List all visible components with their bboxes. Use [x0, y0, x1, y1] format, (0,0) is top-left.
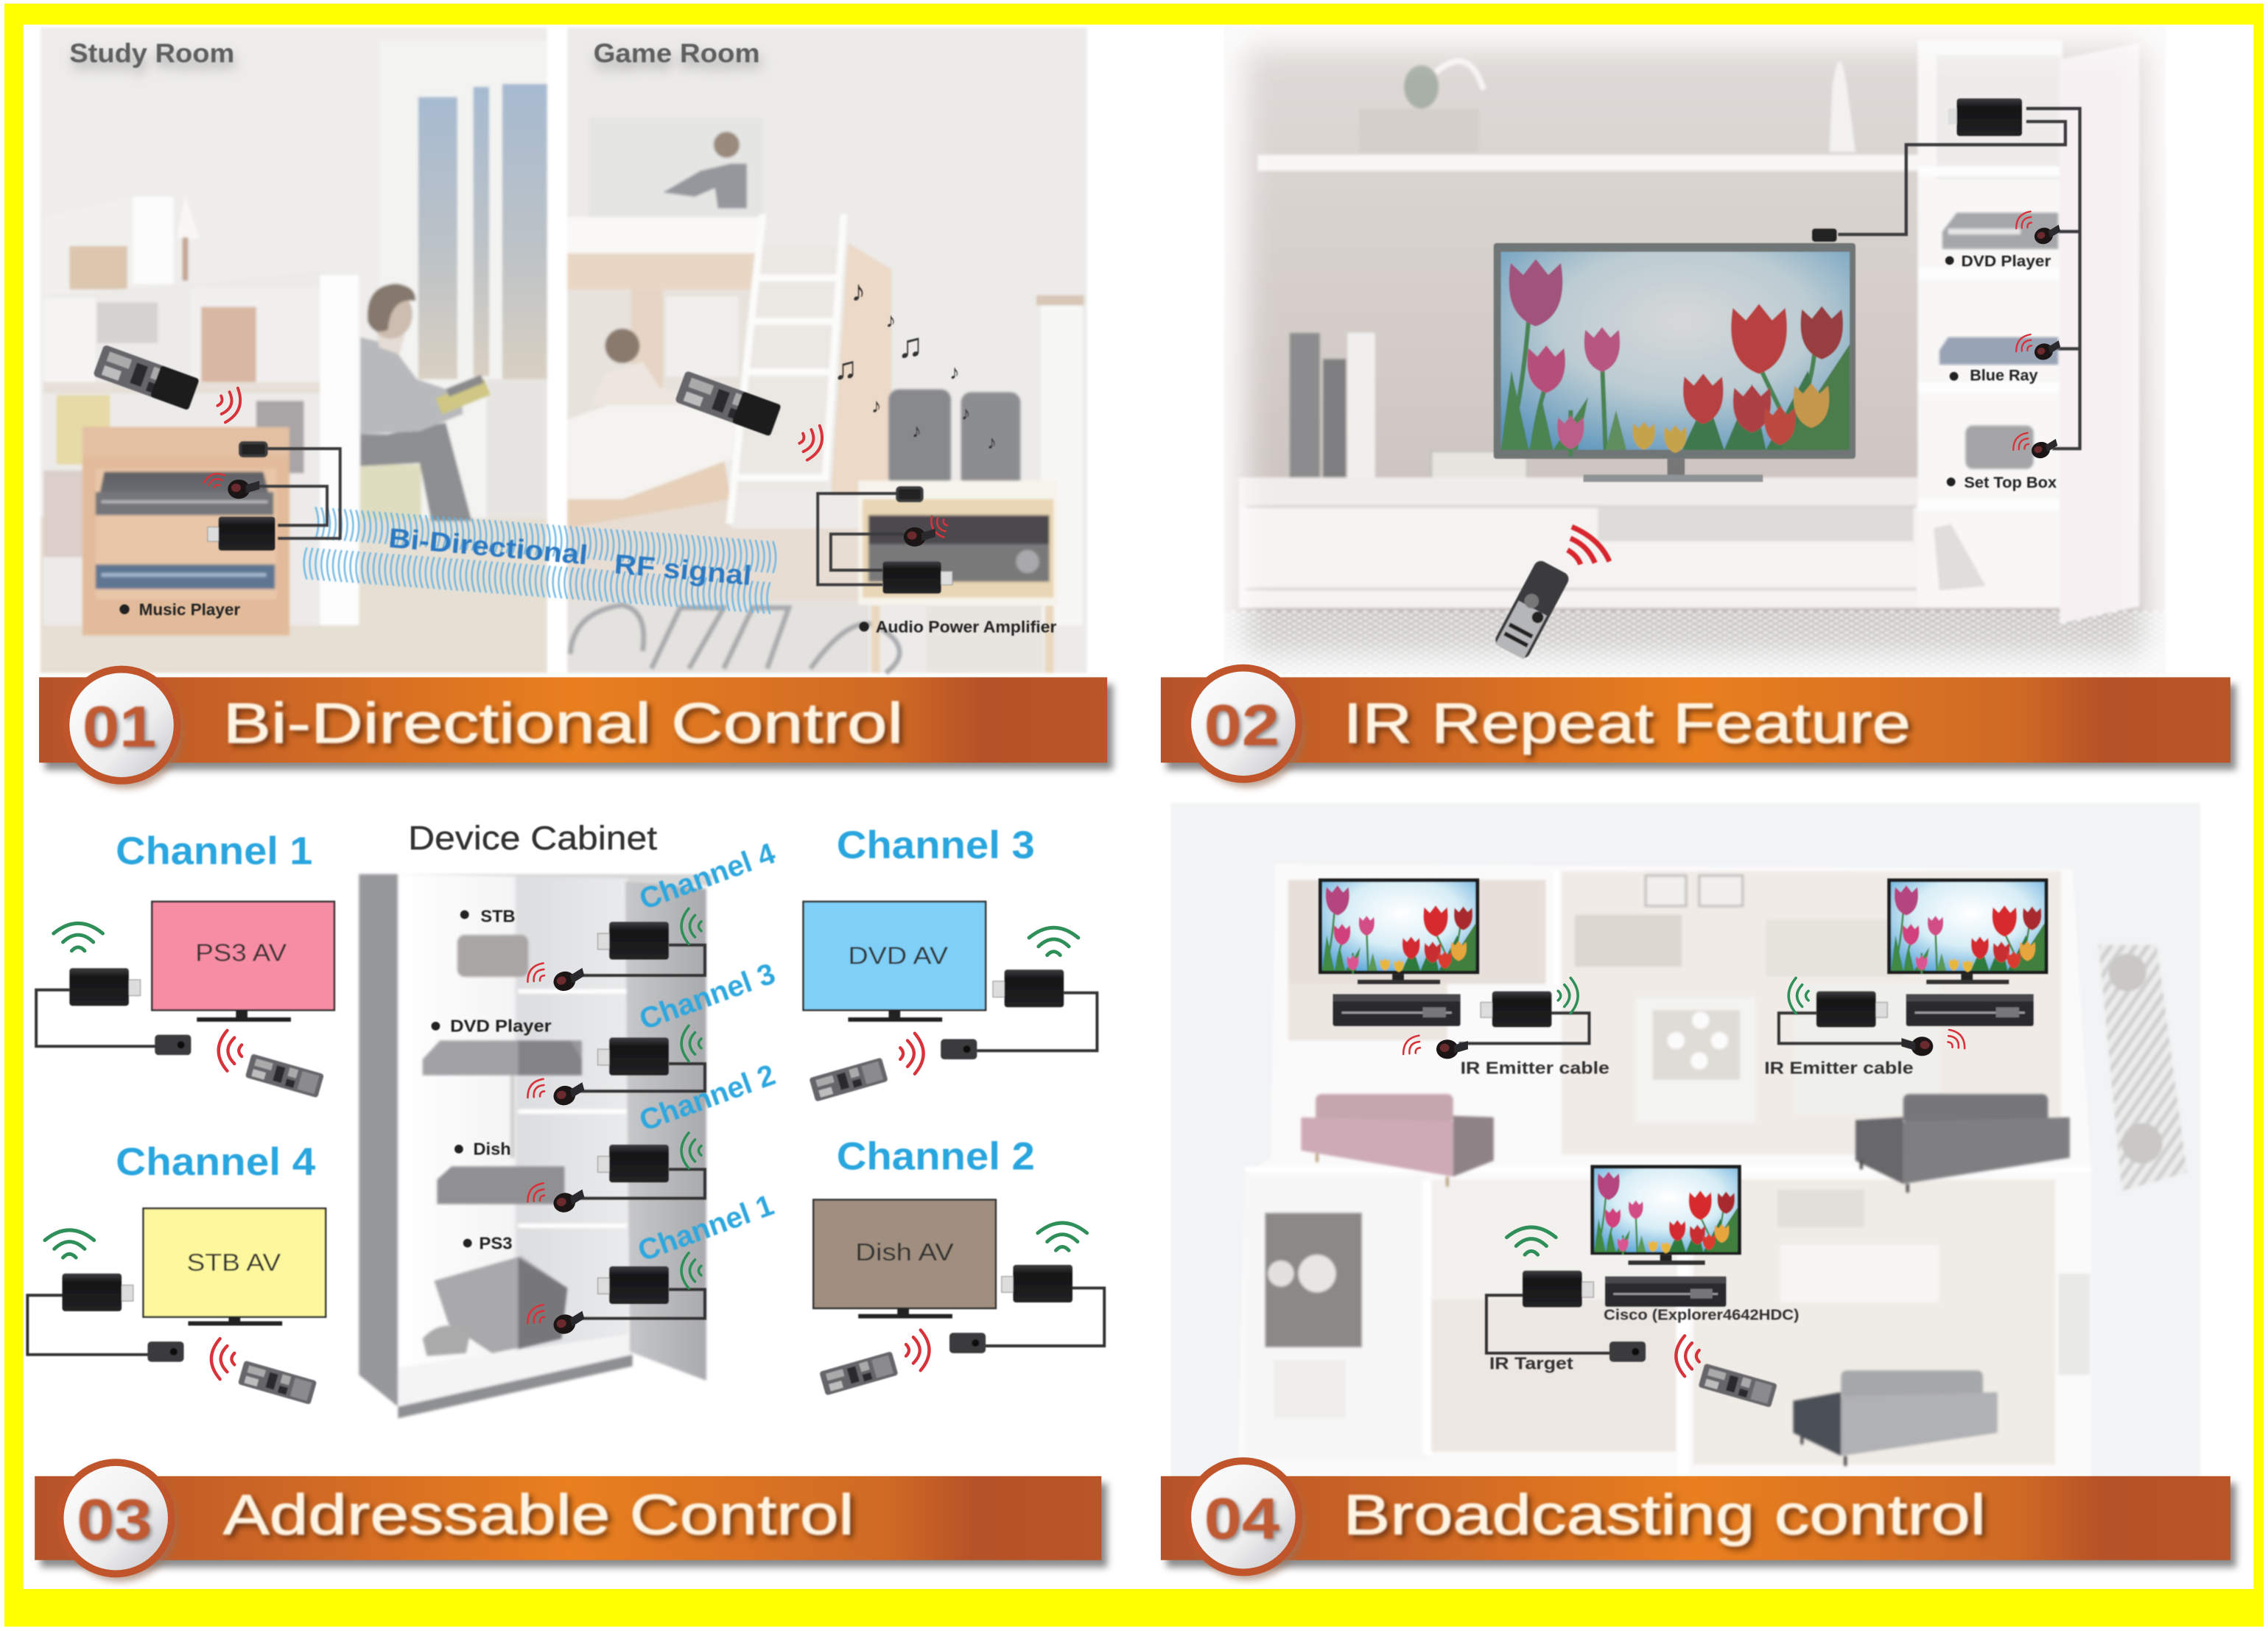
music notes — [834, 276, 997, 453]
banner 04 — [1161, 1461, 2236, 1580]
repeater: game room — [883, 561, 952, 594]
text: bi-directional RF signal: Bi-Directional — [387, 522, 589, 570]
repeater in cabinet — [1948, 99, 2022, 136]
labels: IR Emitter cable — [1461, 1059, 1609, 1078]
channel 1 group — [36, 829, 334, 1098]
music notes: ♪ — [886, 309, 896, 332]
IR signal — [900, 1034, 924, 1074]
DVD player — [1942, 213, 2058, 249]
banner 03: Addressable Control — [223, 1484, 854, 1546]
music notes: ♪ — [949, 361, 960, 384]
banner 02 — [1161, 668, 2236, 788]
labels: Cisco (Explorer4642HDC) — [1604, 1307, 1799, 1324]
label: set top box: Set Top Box — [1964, 473, 2057, 491]
banner 03 — [35, 1462, 1107, 1582]
banner 02: 02 — [1204, 693, 1279, 758]
banner 04: Broadcasting control — [1343, 1484, 1986, 1546]
green wireless arcs in cabinet — [681, 908, 701, 1288]
TV: DVD AV: DVD AV — [848, 942, 949, 969]
TV: STB AV: STB AV — [186, 1249, 281, 1277]
emitter at music player — [228, 480, 259, 499]
device: STB — [457, 935, 528, 977]
repeater and cable — [949, 1265, 1104, 1353]
music notes: ♪ — [912, 421, 921, 441]
TV: PS3 AV — [152, 902, 334, 1022]
channel 3 group — [804, 824, 1097, 1102]
cables study room — [240, 443, 340, 539]
heading: room labels: Game Room — [594, 38, 760, 68]
sofa: grey — [1856, 1094, 2070, 1193]
rotated channel labels: Channel 3 — [635, 957, 779, 1037]
photo: living room wall — [1224, 26, 2165, 674]
IR signal — [211, 1339, 234, 1379]
TV: DVD AV — [804, 902, 986, 1022]
RF signal waves — [304, 507, 776, 614]
device: PS3 — [423, 1256, 567, 1356]
emitter at amplifier — [904, 527, 935, 547]
TV right — [1887, 878, 2048, 984]
wifi signal — [1029, 927, 1078, 955]
channel 2 group — [813, 1134, 1104, 1395]
music notes: ♪ — [987, 432, 997, 453]
repeater and cable — [27, 1274, 184, 1362]
remote — [809, 1057, 888, 1102]
green wireless arcs — [1506, 978, 1808, 1255]
label: DVD player: DVD Player — [1961, 251, 2051, 270]
IR target on TV — [1812, 228, 1836, 242]
left repeater and cable — [1459, 992, 1589, 1043]
game room amplifier cabinet — [858, 480, 1058, 605]
repeaters in cabinet — [598, 922, 669, 1304]
repeater and cable — [941, 969, 1097, 1059]
TV centre — [1590, 1165, 1741, 1265]
label: blue ray: Blue Ray — [1970, 366, 2038, 385]
IR signal from remote — [1567, 527, 1609, 564]
repeater: study room — [208, 516, 275, 550]
device labels in cabinet — [432, 906, 552, 1252]
cabinet — [359, 874, 712, 1418]
red IR arcs — [1400, 1026, 1969, 1376]
labels — [1461, 1059, 1914, 1372]
heading: device cabinet: Device Cabinet — [408, 819, 658, 857]
banner 01: Bi-Directional Control — [223, 692, 903, 755]
IR signal at amplifier — [927, 512, 952, 540]
cables game room — [818, 488, 922, 585]
device labels in cabinet: PS3 — [479, 1233, 513, 1252]
TV: Dish AV: Dish AV — [855, 1239, 955, 1266]
centre repeater and cable — [1486, 1271, 1646, 1362]
panel: 02 IR repeat feature — [1161, 26, 2236, 788]
heading: room labels — [69, 38, 760, 68]
blue ray player — [1939, 337, 2058, 365]
sofa: pink — [1301, 1094, 1494, 1187]
rotated channel labels: Channel 1 — [633, 1188, 778, 1268]
device labels in cabinet: Dish — [474, 1140, 511, 1159]
banner 03: 03 — [77, 1487, 152, 1552]
panel: 01 bi-directional control — [39, 27, 1113, 789]
text: bi-directional RF signal — [387, 522, 753, 591]
heading: room labels: Study Room — [69, 38, 234, 68]
TV: PS3 AV: PS3 AV — [195, 939, 287, 967]
device labels in cabinet: DVD Player — [450, 1017, 552, 1036]
device: dish — [437, 1166, 564, 1204]
wifi signal — [45, 1230, 94, 1258]
TV: STB AV — [144, 1208, 326, 1325]
channel 4 group — [27, 1140, 326, 1405]
music notes: ♪ — [871, 394, 882, 417]
study room remote — [93, 345, 200, 410]
banner 01: 01 — [82, 695, 156, 760]
cabinet cables — [576, 945, 705, 1319]
game room remote — [675, 371, 782, 437]
IR signal — [219, 1031, 242, 1071]
TV: Dish AV — [813, 1200, 996, 1319]
wifi signal — [54, 923, 103, 951]
repeater and cable — [36, 968, 191, 1055]
music notes: ♪ — [851, 276, 866, 308]
wooden device cabinet: music player — [82, 427, 289, 635]
set top box — [1965, 426, 2034, 469]
banner 04: 04 — [1204, 1486, 1279, 1551]
panel: 04 broadcasting control — [1161, 803, 2236, 1580]
television with tulips — [1494, 243, 1856, 482]
set-top boxes — [1333, 995, 2034, 1307]
remote — [245, 1053, 324, 1098]
music notes: ♫ — [834, 351, 857, 387]
TV left — [1319, 878, 1479, 984]
photo: study room — [41, 27, 547, 673]
remote — [238, 1361, 317, 1405]
IR signal game room — [795, 421, 827, 463]
rotated channel labels: Channel 4 — [635, 836, 780, 916]
photo: game room — [567, 27, 1087, 673]
labels: IR Emitter cable — [1764, 1059, 1914, 1078]
label: audio power amplifier: Audio Power Amplifier — [876, 617, 1057, 636]
rotated channel labels: Channel 2 — [635, 1058, 779, 1137]
panel: 03 addressable control — [27, 819, 1107, 1582]
emitters and IR signals — [2009, 208, 2062, 460]
remote — [1698, 1364, 1777, 1408]
banner 01 — [39, 670, 1113, 789]
floor plan background — [1171, 803, 2200, 1478]
labels: IR Target — [1489, 1353, 1573, 1372]
rotated channel labels — [633, 836, 780, 1268]
emitters and IR signals in cabinet — [524, 960, 587, 1336]
remote control — [1493, 558, 1571, 661]
IR signal at music player — [202, 471, 228, 491]
heading: channel 3: Channel 3 — [837, 824, 1035, 867]
banner 02: IR Repeat Feature — [1343, 692, 1911, 755]
sofa: blue grey — [1794, 1370, 1998, 1466]
device labels in cabinet: STB — [480, 906, 516, 925]
device: DVD — [423, 1040, 582, 1076]
remote — [819, 1351, 899, 1395]
emitters — [1436, 1037, 1933, 1059]
text: bi-directional RF signal: RF signal — [613, 548, 753, 591]
heading: channel 4: Channel 4 — [116, 1140, 316, 1184]
right repeater and cable — [1779, 992, 1908, 1043]
IR signal — [906, 1330, 929, 1370]
music notes: ♫ — [897, 326, 924, 365]
heading: channel 2: Channel 2 — [837, 1134, 1035, 1178]
label: music player: Music Player — [139, 600, 240, 619]
heading: channel 1: Channel 1 — [116, 829, 312, 873]
speakers — [888, 389, 1020, 489]
music notes: ♪ — [961, 404, 970, 424]
wifi signal — [1038, 1223, 1087, 1250]
IR signal study room — [213, 384, 245, 425]
cables to emitters — [1838, 108, 2080, 449]
